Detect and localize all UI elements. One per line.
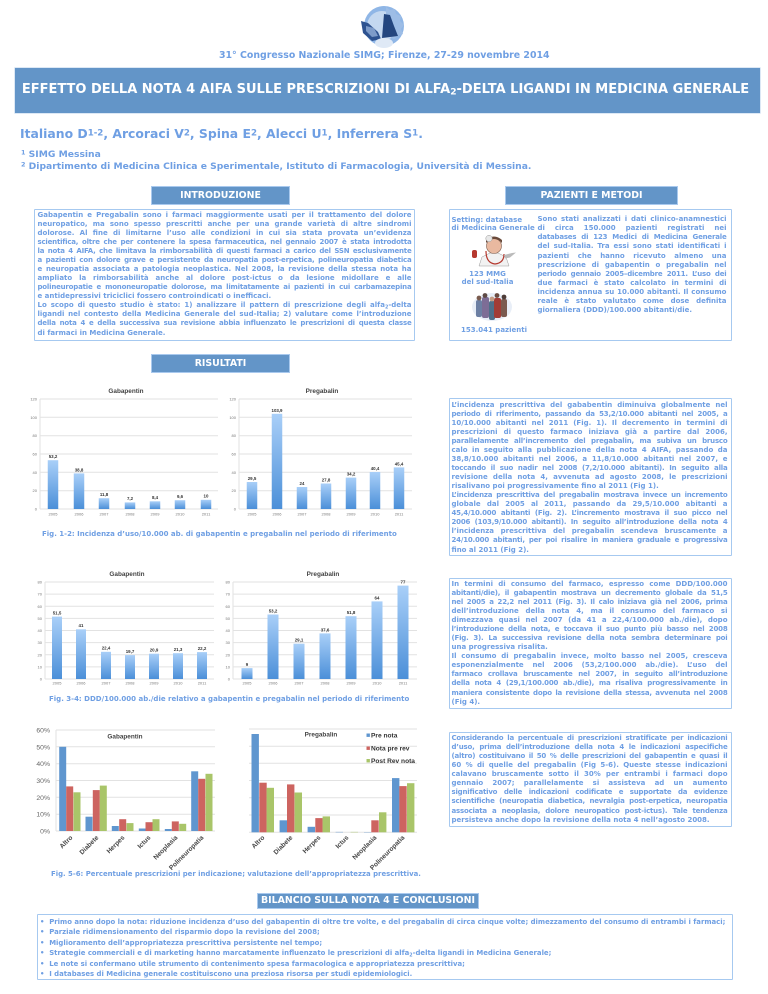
bar chart: pregabalin incidenza: 27,8 bbox=[322, 478, 331, 482]
bar chart: pregabalin indicazioni: Neoplasia bbox=[351, 834, 379, 861]
bar chart: pregabalin incidenza: 120 bbox=[229, 396, 237, 402]
text: commento DDD: della nota 4 (29,1/100.000 ab./die), ma risaliva progressivamente in bbox=[452, 679, 728, 687]
text: introduzione: a pazienti con dolore grave e persistente da neuropatia post-erpetica, polineuropatia diabetica bbox=[38, 256, 412, 264]
bar chart: pregabalin incidenza: 2008 bbox=[322, 512, 331, 516]
legend bbox=[366, 732, 415, 765]
bar chart: gabapentin incidenza: 10 bbox=[204, 494, 209, 498]
bar chart: gabapentin indicazioni: Herpes bbox=[106, 834, 127, 855]
caption: fig 1-2: Fig. 1-2: Incidenza d’uso/10.000 ab. di gabapentin e pregabalin nel periodo di riferimento bbox=[42, 530, 397, 538]
text: commento indicazioni: persisteva anche dopo la revisione della nota 4 nell’agosto 2008. bbox=[452, 816, 710, 824]
bar chart: gabapentin DDD: 2008 bbox=[126, 680, 135, 686]
icon: crowd of patients bbox=[472, 293, 512, 321]
caption: fig 3-4: Fig. 3-4: DDD/100.000 ab./die relativo a gabapentin e pregabalin nel periodo di riferimento bbox=[49, 695, 409, 703]
bar chart: gabapentin indicazioni: 0% bbox=[40, 828, 50, 836]
bar chart: gabapentin indicazioni: 20% bbox=[36, 795, 50, 802]
bar chart: gabapentin incidenza: 60 bbox=[33, 452, 38, 456]
bar chart: gabapentin incidenza: 2009 bbox=[151, 512, 160, 516]
list: conclusioni bbox=[40, 918, 725, 978]
bar chart: gabapentin DDD: 70 bbox=[38, 592, 43, 597]
bar chart: gabapentin indicazioni: 30% bbox=[36, 778, 50, 785]
bar chart: gabapentin incidenza: 11,8 bbox=[100, 492, 109, 497]
bar chart: pregabalin DDD: 70 bbox=[226, 592, 231, 597]
bar chart: gabapentin DDD bbox=[38, 571, 214, 686]
bar chart: pregabalin incidenza: 45,4 bbox=[395, 462, 404, 466]
text: metodi: prescrizione di gabapentin o pregabalin nel bbox=[538, 261, 726, 269]
text: metodi: del sud-Italia. Tra essi sono stati identificati i bbox=[538, 242, 726, 250]
bar chart: pregabalin incidenza: 40 bbox=[232, 470, 237, 475]
text: 123 MMG bbox=[462, 270, 513, 286]
text: metodi: periodo gennaio 2005–dicembre 2011. L’uso dei bbox=[538, 270, 726, 278]
bar chart: gabapentin indicazioni: Gabapentin bbox=[107, 734, 143, 740]
bar chart: gabapentin incidenza: 8,4 bbox=[152, 495, 159, 500]
legend: Pre nota bbox=[371, 732, 398, 740]
bar chart: gabapentin DDD: 2010 bbox=[174, 680, 183, 686]
text: 153.041 pazienti: 153.041 pazienti bbox=[461, 326, 527, 334]
text: 123 MMG: 123 MMG bbox=[469, 270, 506, 278]
bar chart: pregabalin incidenza bbox=[229, 388, 412, 516]
text: commento incidenza: toccando il suo nadir nel 2008 (7,2/10.000 abitanti). In seguito alla bbox=[452, 464, 728, 472]
bar chart: gabapentin DDD: 20 bbox=[38, 652, 43, 657]
text: metodi: di circa 150.000 pazienti registrati nei bbox=[538, 224, 726, 232]
bar chart: gabapentin incidenza: 120 bbox=[30, 396, 38, 402]
bar chart: pregabalin DDD: 2011 bbox=[399, 680, 408, 686]
bar chart: gabapentin DDD: 2005 bbox=[53, 680, 62, 686]
text: commento DDD: dimezzava quasi nel 2007 (da 41 a 22,4/100.000 ab./die), dopo bbox=[452, 616, 728, 624]
bar chart: pregabalin indicazioni: Polineuropatia bbox=[369, 834, 407, 872]
bar chart: gabapentin incidenza: 100 bbox=[30, 415, 38, 420]
bar chart: gabapentin incidenza: 0 bbox=[35, 506, 38, 512]
bar chart: pregabalin incidenza: 29,5 bbox=[248, 476, 257, 481]
text: commento DDD: esponenzialmente nel 2006 (53,2/100.000 ab./die). L’uso del bbox=[452, 661, 728, 669]
bar chart: pregabalin DDD: 80 bbox=[226, 580, 231, 584]
bar chart: gabapentin DDD: 0 bbox=[40, 676, 43, 682]
bar chart: pregabalin incidenza: 0 bbox=[234, 506, 237, 512]
bar chart: pregabalin indicazioni: Diabete bbox=[273, 834, 295, 856]
list: conclusioni: • Strategie commerciali e di marketing hanno marcatamente influenzato le prescrizioni di alfa2-delta ligandi in Medicina Generale; bbox=[40, 949, 551, 959]
bar chart: gabapentin DDD: 2006 bbox=[77, 680, 86, 686]
bar chart: gabapentin DDD: 80 bbox=[38, 580, 43, 584]
heading: introduzione: INTRODUZIONE bbox=[180, 190, 261, 201]
bar chart: gabapentin incidenza bbox=[30, 388, 218, 516]
bar chart: pregabalin DDD: 20 bbox=[226, 652, 231, 657]
bar chart: pregabalin DDD: 2010 bbox=[373, 680, 382, 686]
text: commento DDD: maniera consistente dopo la revisione della stessa, avvenuta nel 2008 bbox=[452, 689, 728, 697]
text: commento incidenza: risalivano poi progressivamente fino al 2011 (Fig 1). bbox=[452, 482, 659, 490]
bar chart: pregabalin DDD: 60 bbox=[226, 604, 231, 609]
text: introduzione: ligandi nel contesto della Medicina Generale del sud-Italia; 2) valutare come l’introduzione bbox=[38, 310, 412, 318]
bar chart: gabapentin incidenza: 2005 bbox=[49, 512, 58, 516]
affiliations: 2 Dipartimento di Medicina Clinica e Sperimentale, Istituto di Farmacologia, Università di Messina. bbox=[21, 160, 531, 172]
text: commento incidenza: 2006 (103,9/10.000 abitanti). In seguito all’introduzione della nota 4 bbox=[452, 518, 728, 526]
bar chart: gabapentin indicazioni: Ictus bbox=[137, 834, 153, 850]
bar chart: pregabalin incidenza: 34,2 bbox=[347, 472, 356, 476]
bar chart: gabapentin incidenza: 9,6 bbox=[177, 494, 184, 499]
text: commento indicazioni bbox=[452, 734, 728, 824]
bar chart: pregabalin DDD: 64 bbox=[375, 596, 380, 600]
text: commento incidenza: L’incidenza prescrittiva del gababentin diminuiva globalmente nel bbox=[452, 400, 728, 408]
text: commento indicazioni: associata a neoplasia, dolore neuropatico post-ictus). Tale tendenza bbox=[452, 806, 728, 814]
bar chart: pregabalin incidenza: 100 bbox=[229, 415, 237, 420]
text: commento incidenza: globale dal 2005 al 2011, passando da 29,5/10.000 abitanti a bbox=[452, 500, 728, 508]
text: commento DDD bbox=[452, 580, 728, 706]
bar chart: pregabalin incidenza: Pregabalin bbox=[306, 388, 338, 395]
bar chart: gabapentin DDD: Gabapentin bbox=[109, 571, 145, 578]
panel: commento indicazioni bbox=[449, 732, 732, 827]
bar chart: pregabalin incidenza: 2011 bbox=[395, 512, 404, 516]
bar chart: gabapentin DDD: 10 bbox=[38, 664, 43, 669]
bar chart: gabapentin DDD: 22,2 bbox=[198, 646, 207, 651]
heading: introduzione bbox=[151, 186, 290, 205]
bar chart: gabapentin incidenza: Gabapentin bbox=[108, 388, 144, 395]
bar chart: gabapentin DDD: 20,9 bbox=[150, 648, 159, 652]
bar chart: pregabalin DDD: 2006 bbox=[269, 680, 278, 686]
bar chart: gabapentin DDD: 22,4 bbox=[102, 646, 111, 650]
text: commento incidenza: parallelamente all’incremento del pregabalin, ma subiva un brusco bbox=[452, 437, 728, 445]
text: commento incidenza bbox=[452, 400, 728, 554]
text: commento indicazioni: scientifiche (neuropatia diabetica, nevralgia post-erpetica, neuropatia bbox=[452, 797, 728, 805]
text: commento incidenza: 24/10.000 abitanti, per poi risalire in maniera graduale e progressiva bbox=[452, 536, 728, 544]
bar chart: gabapentin incidenza: 2008 bbox=[126, 512, 135, 516]
bar chart: pregabalin incidenza: 2007 bbox=[298, 512, 307, 516]
bar chart: pregabalin DDD: 2005 bbox=[243, 680, 252, 686]
text: commento DDD: l’introduzione della nota, e toccava il suo punto più basso nel 2008 bbox=[452, 625, 728, 633]
icon: doctor bbox=[472, 235, 516, 266]
text: metodi: Sono stati analizzati i dati clinico-anamnestici bbox=[538, 215, 726, 223]
bar chart: gabapentin DDD: 41 bbox=[79, 623, 84, 628]
bar chart: gabapentin indicazioni: Altro bbox=[59, 834, 74, 850]
bar chart: gabapentin DDD: 51,5 bbox=[53, 610, 62, 616]
bar chart: gabapentin indicazioni: Polineuropatia bbox=[168, 834, 206, 872]
heading: bilancio e conclusioni: BILANCIO SULLA NOTA 4 E CONCLUSIONI bbox=[261, 895, 475, 906]
icon: SIMG logo bbox=[361, 6, 404, 48]
bar chart: pregabalin DDD: 2009 bbox=[347, 680, 356, 686]
bar chart: gabapentin DDD: 2009 bbox=[150, 680, 159, 686]
text: introduzione bbox=[38, 211, 412, 336]
bar chart: pregabalin DDD: 10 bbox=[226, 664, 231, 669]
list: conclusioni: • Miglioramento dell’appropriatezza prescrittiva persistente nel tempo; bbox=[40, 939, 322, 947]
text: introduzione: scientifica, oltre che per contenere la spesa farmaceutica, nel gennaio 2007 è stata introdotta bbox=[38, 238, 412, 246]
bar chart: pregabalin DDD: 2008 bbox=[321, 680, 330, 686]
panel: introduzione bbox=[34, 209, 415, 341]
bar chart: gabapentin incidenza: 2007 bbox=[100, 512, 109, 516]
bar chart: pregabalin incidenza: 40,4 bbox=[371, 466, 380, 471]
bar chart: gabapentin incidenza: 2011 bbox=[202, 512, 211, 516]
bar chart: gabapentin indicazioni: 40% bbox=[36, 761, 50, 768]
bar chart: pregabalin incidenza: 103,9 bbox=[272, 408, 283, 413]
legend: Nota pre rev bbox=[371, 746, 410, 752]
bar chart: gabapentin incidenza: 80 bbox=[33, 433, 38, 438]
text: commento incidenza: fino al 2011 (Fig 2). bbox=[452, 546, 529, 554]
bar chart: gabapentin DDD: 50 bbox=[38, 616, 43, 621]
text: introduzione: Lo scopo di questo studio è stato: 1) analizzare il pattern di prescrizione degli alfa2-delta bbox=[38, 301, 412, 311]
bar chart: pregabalin incidenza: 80 bbox=[232, 433, 237, 438]
bar chart: gabapentin DDD: 19,7 bbox=[126, 649, 135, 654]
text: 123 MMG: del sud-Italia bbox=[462, 278, 513, 286]
text: introduzione: di farmaci in Medicina Generale. bbox=[38, 328, 165, 336]
text: setting: di Medicina Generale bbox=[452, 224, 535, 232]
text: metodi: pazienti che hanno ricevuto almeno una bbox=[538, 252, 726, 260]
text: metodi: reale è stato valutato come dose definita bbox=[538, 297, 726, 305]
text: metodi: incidenza annua su 10.000 abitanti. Il consumo bbox=[538, 288, 726, 296]
bar chart: pregabalin DDD: 2007 bbox=[295, 680, 304, 686]
text: metodi: databases di 123 Medici di Medicina Generale bbox=[538, 233, 726, 241]
bar chart: gabapentin incidenza: 40 bbox=[33, 470, 38, 475]
bar chart: pregabalin incidenza: 2010 bbox=[371, 512, 380, 516]
bar chart: pregabalin incidenza: 2006 bbox=[273, 512, 282, 516]
bar chart: pregabalin DDD: 30 bbox=[226, 640, 231, 645]
text: commento DDD: farmaco crollava bruscamente nel 2007, in seguito all’introduzione bbox=[452, 670, 728, 678]
text: introduzione: Gabapentin e Pregabalin sono i farmaci maggiormente usati per il trattamento del dolore bbox=[38, 211, 412, 219]
heading: risultati: RISULTATI bbox=[195, 358, 246, 369]
bar chart: gabapentin DDD: 60 bbox=[38, 604, 43, 609]
affiliations: 1 SIMG Messina bbox=[21, 148, 101, 160]
list: conclusioni: • I databases di Medicina generale costituiscono una preziosa risorsa per studi epidemiologici. bbox=[40, 970, 412, 978]
caption: fig 5-6: Fig. 5-6: Percentuale prescrizioni per indicazione; valutazione dell’appropriatezza prescrittiva. bbox=[51, 870, 421, 878]
text: introduzione: polineuropatie e mononeuropatie dolorose, ma limitatamente ai pazienti in cui carbamazepina bbox=[38, 283, 412, 291]
text: commento DDD: (Fig. 3). La successiva revisione della nota sembra determinare poi bbox=[452, 634, 728, 642]
text: setting: Setting: database bbox=[452, 216, 522, 224]
bar chart: gabapentin incidenza: 2010 bbox=[176, 512, 185, 516]
bar chart: pregabalin DDD: 51,8 bbox=[347, 610, 356, 615]
text: introduzione: e neuropatia associata a patologia neoplastica. Nel 2008, la revisione della stessa nota ha bbox=[38, 265, 412, 273]
heading: pazienti e metodi: PAZIENTI E METODI bbox=[540, 190, 642, 201]
bar chart: gabapentin DDD: 21,3 bbox=[174, 647, 183, 652]
bar chart: gabapentin indicazioni: Neoplasia bbox=[152, 834, 180, 861]
text: commento DDD: (Fig 4). bbox=[452, 698, 480, 706]
text: introduzione: ampliato la rimborsabilità anche al dolore post-ictus o da lesione midollare e alle bbox=[38, 274, 412, 282]
bar chart: gabapentin indicazioni: 50% bbox=[36, 744, 50, 751]
text: introduzione: della nota 4 e della successiva sua revisione abbia influenzato le prescrizioni di questa classe bbox=[38, 319, 412, 327]
bar chart: pregabalin incidenza: 24 bbox=[300, 481, 305, 486]
bar chart: gabapentin DDD: 2011 bbox=[198, 680, 207, 686]
text: commento indicazioni: d’uso, prima dell’introduzione della nota 4 le indicazioni aspecifiche bbox=[452, 743, 728, 751]
bar chart: gabapentin incidenza: 20 bbox=[33, 488, 38, 493]
text: commento incidenza: 38,8/10.000 abitanti nel 2006, a 11,8/10.000 abitanti nel 2007, e bbox=[452, 455, 728, 463]
bar chart: pregabalin incidenza: 20 bbox=[232, 488, 237, 493]
text: commento DDD: In termini di consumo del farmaco, espresso come DDD/100.000 bbox=[452, 580, 728, 588]
bar chart: pregabalin incidenza: 60 bbox=[232, 452, 237, 456]
bar chart: gabapentin indicazioni bbox=[36, 728, 215, 872]
panel: pazienti e metodi bbox=[449, 209, 732, 341]
bar chart: gabapentin incidenza: 7,2 bbox=[127, 496, 134, 501]
text: introduzione: neuropatico, ma sono spesso prescritti anche per una grande varietà di altre sindromi bbox=[38, 220, 412, 228]
text: introduzione: dolorose. Al fine di limitarne l’uso alle condizioni in cui sia stata provata un’evidenza bbox=[38, 229, 412, 237]
text: commento indicazioni: Considerando la percentuale di prescrizioni stratificate per indicazioni bbox=[452, 734, 728, 742]
bar chart: pregabalin DDD: 53,2 bbox=[269, 608, 278, 614]
title banner bbox=[15, 68, 760, 113]
bar chart: pregabalin incidenza: 2005 bbox=[248, 512, 257, 516]
bar chart: pregabalin DDD: 40 bbox=[226, 628, 231, 633]
text: commento incidenza: prescrizioni di questo farmaco iniziava già a partire dal 2006, bbox=[452, 428, 728, 436]
text: metodi: due farmaci è stato calcolato in termini di bbox=[538, 279, 726, 287]
bar chart: gabapentin indicazioni: 10% bbox=[36, 812, 50, 819]
text: commento indicazioni: 60 % di quelle del pregabalin (Fig 5-6). Queste stesse indicazioni bbox=[452, 761, 728, 769]
text: commento indicazioni: significativo delle indicazioni codificate e supportate da evidenze bbox=[452, 788, 728, 796]
text: commento indicazioni: calavano bruscamente sotto il 30% per entrambi i farmaci dopo bbox=[452, 770, 728, 778]
title banner: EFFETTO DELLA NOTA 4 AIFA SULLE PRESCRIZIONI DI ALFA2-DELTA LIGANDI IN MEDICINA GENERALE bbox=[22, 82, 749, 98]
bar chart: pregabalin indicazioni bbox=[249, 728, 417, 872]
bar chart: gabapentin DDD: 2007 bbox=[102, 680, 111, 686]
text: commento incidenza: L’incidenza prescrittiva del pregabalin mostrava invece un incremento bbox=[452, 491, 728, 499]
heading: pazienti e metodi bbox=[505, 186, 678, 205]
heading: bilancio e conclusioni bbox=[257, 893, 479, 908]
bar chart: pregabalin DDD: 50 bbox=[226, 616, 231, 621]
authors: Italiano D1-2, Arcoraci V2, Spina E2, Alecci U1, Inferrera S1. bbox=[20, 126, 423, 141]
text: commento indicazioni: (altro) costituivano il 50 % delle prescrizioni del gabapentin e quasi il bbox=[452, 752, 728, 760]
bar chart: pregabalin DDD: 77 bbox=[401, 580, 406, 584]
bar chart: gabapentin incidenza: 2006 bbox=[75, 512, 84, 516]
bar chart: pregabalin indicazioni: Herpes bbox=[302, 834, 323, 855]
text: commento incidenza: calo in seguito alla pubblicazione della nota 4 AIFA, passando da bbox=[452, 446, 728, 454]
bar chart: pregabalin DDD bbox=[226, 571, 417, 686]
panel: commento DDD bbox=[449, 578, 732, 709]
bar chart: pregabalin indicazioni: Altro bbox=[251, 834, 266, 850]
text: commento DDD: dell’introduzione della nota 4, ma il consumo del farmaco si bbox=[452, 607, 728, 615]
list: conclusioni: • Parziale ridimensionamento del risparmio dopo la revisione del 2008; bbox=[40, 928, 320, 936]
bar chart: gabapentin DDD: 40 bbox=[38, 628, 43, 633]
bar chart: gabapentin DDD: 30 bbox=[38, 640, 43, 645]
bar chart: pregabalin DDD: Pregabalin bbox=[307, 571, 339, 578]
text: commento DDD: una progressiva risalita. bbox=[452, 643, 548, 651]
text: setting bbox=[452, 216, 535, 232]
text: introduzione: e antidepressivi triciclici fossero controindicati o inefficaci. bbox=[38, 292, 271, 300]
text: commento incidenza: l’incidenza prescrittiva del pregabalin scendeva bruscamente a bbox=[452, 527, 728, 535]
bar chart: pregabalin DDD: 29,1 bbox=[295, 638, 304, 642]
legend: Post Rev nota bbox=[371, 758, 415, 765]
text: commento incidenza: 45,4/10.000 abitanti (Fig. 2). L’incremento mostrava il suo picco nel bbox=[452, 509, 728, 517]
bar chart: pregabalin DDD: 9 bbox=[246, 662, 249, 667]
panel: conclusioni bbox=[37, 914, 733, 980]
text: metodi: giornaliera (DDD)/100.000 abitanti/die. bbox=[538, 306, 692, 314]
bar chart: pregabalin DDD: 0 bbox=[228, 676, 231, 682]
text: commento incidenza: revisione della nota 4, avvenuta ad agosto 2008, le prescrizioni bbox=[452, 473, 728, 481]
bar chart: pregabalin incidenza: 2009 bbox=[347, 512, 356, 516]
heading: risultati bbox=[151, 354, 290, 373]
bar chart: gabapentin indicazioni: 60% bbox=[36, 728, 50, 734]
bar chart: gabapentin indicazioni: Diabete bbox=[79, 834, 101, 856]
text: commento DDD: nel 2005 a 22,2 nel 2011 (Fig. 3). Il calo iniziava già nel 2006, prima bbox=[452, 598, 728, 606]
text: commento DDD: abitanti/die), il gabapentin mostrava un decremento globale da 51,5 bbox=[452, 589, 728, 597]
text: commento incidenza: periodo di riferimento, passando da 53,2/10.000 abitanti nel 2005, a bbox=[452, 410, 728, 418]
text: commento indicazioni: gennaio 2007; parallelamente si assisteva ad un aumento bbox=[452, 779, 728, 787]
bar chart: pregabalin indicazioni: Pregabalin bbox=[305, 732, 337, 738]
bar chart: pregabalin DDD: 37,6 bbox=[321, 628, 330, 632]
text: metodi bbox=[538, 215, 726, 314]
bar chart: gabapentin incidenza: 53,2 bbox=[49, 454, 58, 459]
bar chart: pregabalin indicazioni: Ictus bbox=[335, 834, 351, 850]
affiliations bbox=[21, 148, 531, 172]
congress line: 31° Congresso Nazionale SIMG; Firenze, 27-29 novembre 2014 bbox=[219, 50, 550, 61]
list: conclusioni: • Primo anno dopo la nota: riduzione incidenza d’uso del gabapentin di oltre tre volte, e del pregabalin di circa cinque volte; dimezzamento del consumo di entrambi i farmaci; bbox=[40, 918, 725, 926]
bar chart: gabapentin incidenza: 38,8 bbox=[75, 468, 84, 472]
list: conclusioni: • Le note si confermano utile strumento di contenimento spesa farmacologica e appropriatezza prescrittiva; bbox=[40, 960, 465, 968]
panel: commento incidenza bbox=[449, 398, 732, 556]
text: commento DDD: Il consumo di pregabalin invece, molto basso nel 2005, cresceva bbox=[452, 652, 728, 660]
text: introduzione: la nota 4 AIFA, che limitava la rimborsabilità di questi farmaci a carico del SSN esclusivamente bbox=[38, 247, 412, 255]
text: commento incidenza: 10/10.000 abitanti nel 2011 (Fig. 1). Il decremento in termini di bbox=[452, 419, 728, 427]
